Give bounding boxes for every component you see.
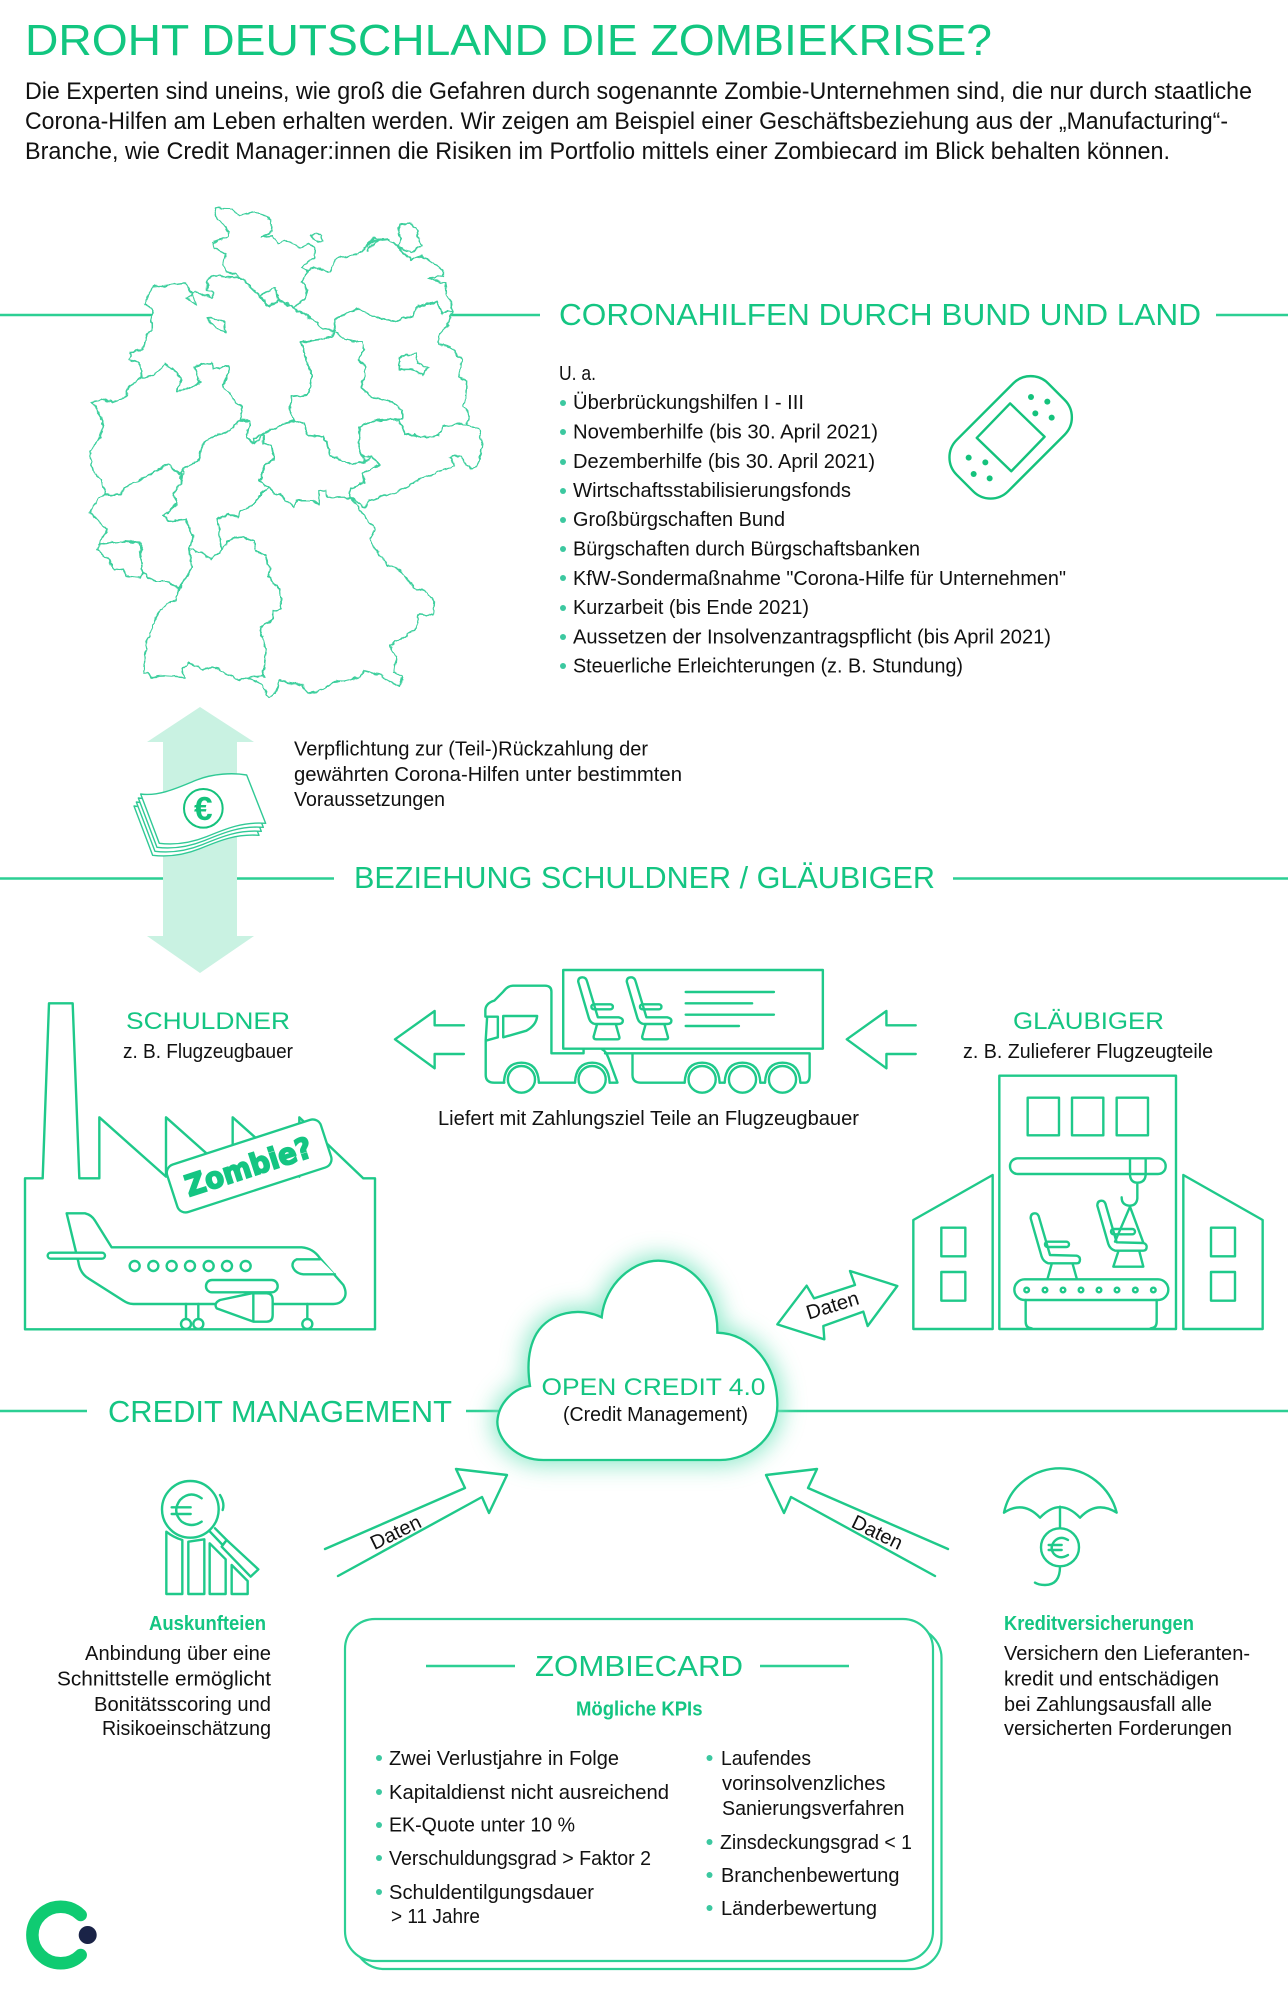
text: credit agencies: Schnittstelle ermöglicht [57,1668,271,1690]
heading: credit management: CREDIT MANAGEMENT [108,1394,452,1429]
text: credit agencies [57,1613,271,1740]
section rule: corona aid [0,314,1288,316]
heading: debtor: SCHULDNER [126,1008,290,1035]
text: credit insurers: versicherten Forderungen [1004,1717,1232,1740]
icon: factory with plane [25,1003,375,1329]
plane [48,1213,346,1329]
zombiecard right list: Sanierungsverfahren [722,1797,904,1820]
text: repayment obligation: Voraussetzungen [294,788,445,811]
list: corona aid measures: Überbrückungshilfen I - III [573,391,804,414]
heading: corona aid: CORONAHILFEN DURCH BUND UND LAND [559,297,1201,332]
text: credit agencies: Anbindung über eine [85,1642,271,1665]
zombiecard left list: EK-Quote unter 10 % [389,1814,575,1836]
icon: umbrella [1004,1468,1117,1585]
list: corona aid measures: Aussetzen der Insolvenzantragspflicht (bis April 2021) [573,626,1051,648]
zombiecard right list: Laufendes [721,1747,811,1770]
arrow right [847,1011,916,1068]
zombiecard left list [376,1747,669,1928]
zombiecard left list: Verschuldungsgrad > Faktor 2 [389,1847,651,1870]
list: corona aid measures [559,362,1066,678]
text: credit agencies: Auskunfteien [149,1613,266,1635]
cloud label [542,1374,766,1426]
text: repayment obligation: gewährten Corona-Hilfen unter bestimmten [294,763,682,786]
list: corona aid measures: Dezemberhilfe (bis 30. April 2021) [573,450,875,473]
arrow: data exchange: Daten [804,1288,862,1324]
heading: debtor [123,1008,293,1063]
intro text: Branche, wie Credit Manager:innen die Risiken im Portfolio mittels einer Zombiecard im Blick behalten können. [25,138,1170,165]
zombiecard left list: > 11 Jahre [391,1905,480,1928]
zombiecard subheading: Mögliche KPIs [576,1698,702,1720]
section rule: relationship [0,877,1288,880]
list: corona aid measures: Bürgschaften durch Bürgschaftsbanken [573,538,920,560]
logo [32,1907,97,1963]
zombiecard right list: Länderbewertung [721,1897,877,1920]
arrow: data from insurers: Daten [848,1511,906,1555]
section rule: credit management [0,1410,1288,1412]
text: credit agencies: Risikoeinschätzung [102,1717,271,1740]
arrow: data from agencies [325,1469,507,1576]
list: corona aid measures: KfW-Sondermaßnahme "Corona-Hilfe für Unternehmen" [573,567,1066,590]
double arrow: repayment [147,707,254,973]
heading: debtor: z. B. Flugzeugbauer [123,1040,293,1063]
icon: magnifier over bars [162,1481,258,1594]
list: corona aid measures: U. a. [559,362,596,385]
list: corona aid measures: Wirtschaftsstabilisierungsfonds [573,479,851,502]
caption: delivery: Liefert mit Zahlungsziel Teile an Flugzeugbauer [438,1107,859,1130]
zombiecard right list: vorinsolvenzliches [722,1772,886,1795]
zombiecard right list [706,1747,912,1920]
zombiecard right list: Zinsdeckungsgrad < 1 [720,1831,912,1854]
list: corona aid measures: Novemberhilfe (bis 30. April 2021) [573,420,878,444]
icon: bandage [939,366,1082,509]
text: credit insurers: bei Zahlungsausfall alle [1004,1693,1212,1716]
text: credit insurers: kredit und entschädigen [1004,1668,1219,1690]
cloud label: (Credit Management) [563,1403,748,1426]
intro text: Die Experten sind uneins, wie groß die Gefahren durch sogenannte Zombie-Unternehmen sind, die nur durch staatliche [25,78,1252,105]
label: zombie: Zombie? [181,1130,316,1203]
arrow: data from insurers [766,1469,948,1576]
zombiecard left list: Kapitaldienst nicht ausreichend [389,1781,669,1804]
icon: truck with arrows [395,970,916,1093]
label: zombie [165,1117,334,1215]
title: DROHT DEUTSCHLAND DIE ZOMBIEKRISE? [25,16,992,65]
cloud label: OPEN CREDIT 4.0 [542,1374,766,1401]
intro text: Corona-Hilfen am Leben erhalten werden. Wir zeigen am Beispiel einer Geschäftsbeziehung aus der „Manufacturing“- [25,108,1228,135]
heading: creditor: z. B. Zulieferer Flugzeugteile [963,1040,1213,1063]
map of Germany [89,208,482,698]
text: repayment obligation: Verpflichtung zur (Teil-)Rückzahlung der [294,738,648,760]
zombiecard right list: Branchenbewertung [721,1864,900,1887]
intro text [25,78,1252,165]
icon: money stack [134,774,266,856]
heading: creditor: GLÄUBIGER [1013,1008,1164,1035]
icon: supplier factory [913,1076,1263,1329]
text: credit insurers: Versichern den Lieferanten- [1004,1642,1250,1665]
list: corona aid measures: Großbürgschaften Bund [573,508,785,531]
panel: zombiecard [345,1619,942,1969]
icon: money stack: € [194,791,213,828]
list: corona aid measures: Steuerliche Erleichterungen (z. B. Stundung) [573,654,963,678]
list: corona aid measures: Kurzarbeit (bis Ende 2021) [573,596,809,619]
zombiecard left list: Zwei Verlustjahre in Folge [389,1747,619,1770]
arrow: data exchange [777,1271,897,1339]
text: credit insurers: Kreditversicherungen [1004,1613,1194,1635]
text: credit insurers [1004,1613,1250,1740]
text: credit agencies: Bonitätsscoring und [94,1693,271,1716]
zombiecard left list: Schuldentilgungsdauer [389,1881,594,1904]
heading: creditor [963,1008,1213,1063]
heading: relationship: BEZIEHUNG SCHULDNER / GLÄUBIGER [354,860,935,895]
zombiecard heading: ZOMBIECARD [535,1651,743,1683]
cloud: open credit [497,1261,777,1460]
arrow: data from agencies: Daten [367,1511,425,1555]
arrow left [395,1011,464,1068]
text: repayment obligation [294,738,682,811]
